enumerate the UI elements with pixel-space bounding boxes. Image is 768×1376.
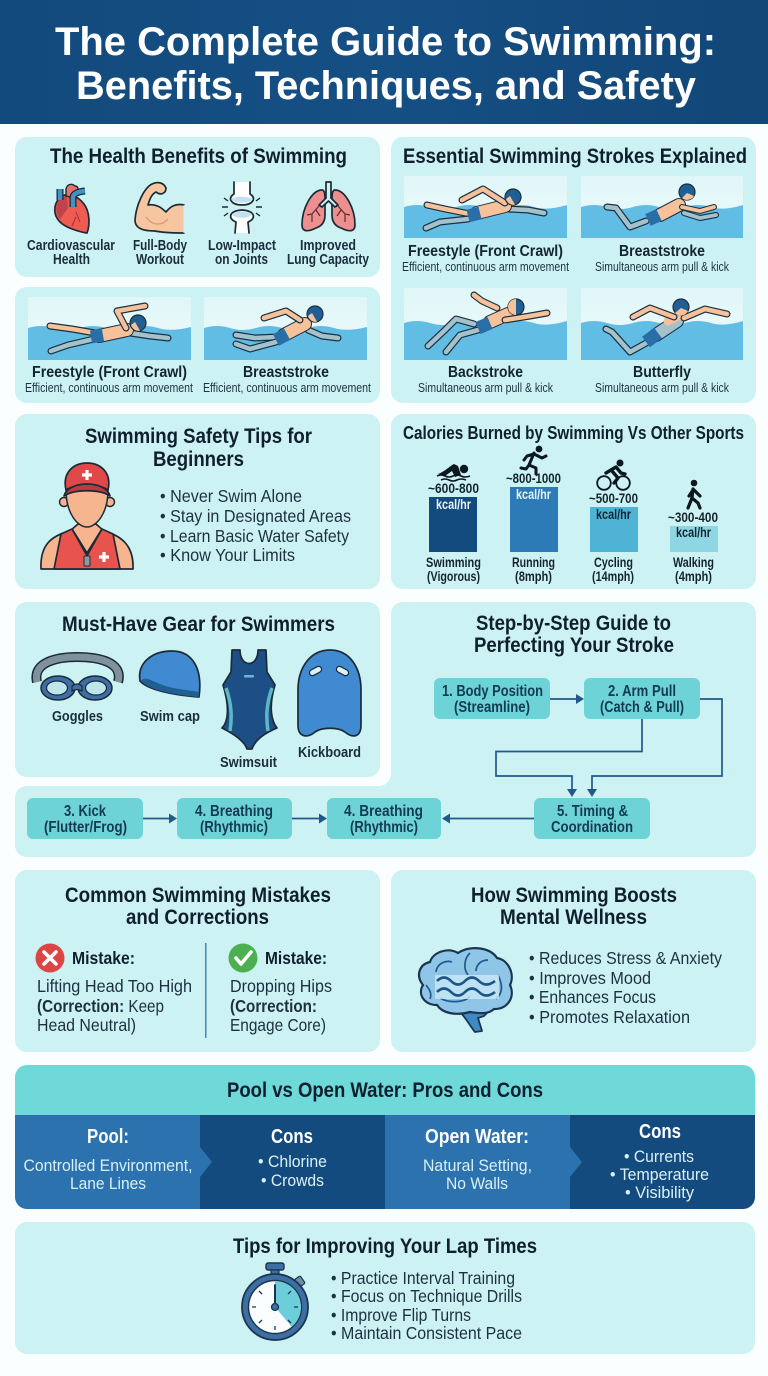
mistake text right: Mistake:	[265, 948, 327, 968]
step 4: 4. Breathing	[195, 803, 273, 820]
panel: common mistakes	[15, 870, 380, 1052]
column: pool cons: • Chlorine	[258, 1152, 327, 1171]
column: open water cons: Cons	[639, 1121, 681, 1143]
step 3: 3. Kick	[64, 803, 106, 820]
stroke captions left: Efficient, continuous arm movement	[25, 381, 193, 395]
mental wellness list	[529, 948, 722, 1027]
stroke captions top row	[402, 243, 730, 274]
icon: swim cap	[140, 651, 200, 697]
bar chart: kcal/hr	[596, 507, 632, 522]
icon: kickboard	[298, 650, 361, 736]
safety list: • Never Swim Alone	[160, 486, 302, 506]
stroke captions left	[25, 364, 371, 395]
stroke captions left: Efficient, continuous arm movement	[203, 381, 371, 395]
panel: gear: Must-Have Gear for Swimmers	[62, 613, 335, 636]
mental heading	[471, 884, 677, 929]
step 2: (Catch & Pull)	[600, 699, 684, 716]
gear labels: Swim cap	[140, 709, 200, 725]
column: open water pros: Open Water:	[425, 1126, 529, 1148]
backstroke illustration	[404, 288, 567, 360]
mistake text right	[230, 948, 332, 1035]
lap tips list: • Practice Interval Training	[331, 1268, 515, 1288]
panel: safety tips	[15, 414, 380, 589]
bar chart: (14mph)	[592, 569, 634, 584]
mistake text left: Lifting Head Too High	[37, 976, 192, 996]
column: pool pros: Controlled Environment,	[24, 1156, 192, 1175]
bar chart: kcal/hr	[676, 525, 712, 540]
stroke captions bottom row	[418, 364, 730, 395]
stroke captions top row: Breaststroke	[619, 243, 705, 260]
step 5: 5. Timing &	[557, 803, 628, 820]
icon: knee joint	[222, 182, 262, 233]
column: open water cons	[610, 1121, 709, 1202]
bar chart: Running	[512, 555, 555, 570]
divider	[205, 943, 206, 1038]
step 4 repeated: (Rhythmic)	[350, 819, 418, 836]
mental wellness list: • Enhances Focus	[529, 987, 656, 1007]
mental wellness list: • Reduces Stress & Anxiety	[529, 948, 722, 968]
butterfly illustration	[581, 288, 743, 360]
step 2: 2. Arm Pull	[608, 683, 676, 700]
panel: lap time tips: Tips for Improving Your Lap Times	[233, 1235, 537, 1258]
mental heading: How Swimming Boosts	[471, 884, 677, 907]
bar chart: (8mph)	[515, 569, 552, 584]
icon: swimsuit	[222, 650, 277, 749]
icon: brain with waves	[419, 948, 512, 1032]
column: open water pros: No Walls	[446, 1174, 508, 1193]
column: pool pros: Lane Lines	[70, 1174, 146, 1193]
benefit labels: Improved	[300, 238, 356, 254]
panel: step-by-step guide	[15, 602, 756, 857]
mistakes heading	[65, 884, 331, 929]
mistake text right: Engage Core)	[230, 1015, 326, 1035]
steps heading: Step-by-Step Guide to	[476, 612, 671, 635]
bar chart	[426, 471, 718, 584]
column: open water cons: • Visibility	[625, 1183, 694, 1202]
steps heading: Perfecting Your Stroke	[474, 634, 674, 657]
mistake text left: (Correction: Keep	[37, 996, 164, 1016]
freestyle illustration	[404, 176, 567, 238]
comparison heading: Pool vs Open Water: Pros and Cons	[227, 1079, 543, 1102]
column: open water pros	[423, 1126, 532, 1193]
icon: runner	[521, 446, 546, 474]
column: pool pros: Pool:	[87, 1126, 129, 1148]
icon: lifeguard	[41, 463, 133, 569]
header banner with title: Benefits, Techniques, and Safety	[76, 64, 697, 108]
panel: pool vs open water	[15, 1065, 755, 1209]
column: open water cons: • Temperature	[610, 1165, 709, 1184]
bar chart: kcal/hr	[516, 487, 552, 502]
stroke captions bottom row: Backstroke	[448, 364, 523, 381]
gear labels: Goggles	[52, 709, 103, 725]
benefit labels: on Joints	[215, 252, 268, 268]
icon: walker	[688, 480, 700, 508]
gear labels: Kickboard	[298, 745, 361, 761]
mistake text right: (Correction:	[230, 996, 317, 1016]
bar chart: Swimming	[426, 555, 481, 570]
mistakes heading: and Corrections	[126, 906, 269, 929]
mental wellness list: • Promotes Relaxation	[529, 1007, 690, 1027]
panel: health benefits	[15, 137, 380, 277]
header banner with title: The Complete Guide to Swimming:	[55, 20, 716, 64]
safety list: • Know Your Limits	[160, 545, 295, 565]
stroke captions left: Breaststroke	[243, 364, 329, 381]
bar chart: ~500-700	[589, 491, 638, 506]
column: pool cons: Cons	[271, 1126, 313, 1148]
panel: lap time tips	[15, 1222, 755, 1354]
icon: heart	[55, 184, 89, 233]
stroke captions bottom row: Simultaneous arm pull & kick	[595, 381, 730, 395]
icon: swimmer	[437, 464, 470, 481]
bar chart: ~800-1000	[506, 471, 561, 486]
freestyle illustration left	[28, 297, 191, 360]
step 1: 1. Body Position	[442, 683, 543, 700]
lap tips list	[331, 1268, 522, 1343]
stroke captions top row: Efficient, continuous arm movement	[402, 260, 569, 274]
column: open water pros: Natural Setting,	[423, 1156, 532, 1175]
icon: stopwatch	[242, 1263, 308, 1340]
icon: red cross	[36, 944, 64, 972]
stroke captions bottom row: Simultaneous arm pull & kick	[418, 381, 554, 395]
bar chart: (4mph)	[675, 569, 712, 584]
bar chart: kcal/hr	[436, 497, 472, 512]
mistake text left: Mistake:	[72, 948, 135, 968]
breaststroke illustration left	[204, 297, 367, 360]
step 4 repeated	[327, 798, 441, 839]
icon: green check	[228, 944, 258, 972]
step 3: (Flutter/Frog)	[44, 819, 127, 836]
benefit labels: Full-Body	[133, 238, 187, 254]
gear labels	[52, 709, 361, 771]
panel: mental wellness	[391, 870, 756, 1052]
benefit labels: Cardiovascular	[27, 238, 115, 254]
step 4 repeated: 4. Breathing	[344, 803, 423, 820]
mistake text left	[37, 948, 192, 1035]
stroke captions bottom row: Butterfly	[633, 364, 691, 381]
step 4: (Rhythmic)	[200, 819, 268, 836]
safety list	[160, 486, 351, 565]
icon: cyclist	[597, 460, 630, 490]
mental heading: Mental Wellness	[500, 906, 647, 929]
icon: goggles	[36, 657, 119, 700]
step 5	[534, 798, 650, 839]
benefit labels: Health	[53, 252, 90, 268]
panel: two strokes (left)	[15, 287, 380, 403]
bar chart: ~600-800	[428, 481, 479, 496]
safety heading	[85, 425, 312, 471]
flow arrows	[143, 694, 722, 824]
benefit labels: Lung Capacity	[287, 252, 369, 268]
panel: health benefits: The Health Benefits of Swimming	[50, 145, 347, 168]
header banner with title	[0, 0, 768, 124]
lap tips list: • Focus on Technique Drills	[331, 1286, 522, 1306]
breaststroke illustration	[581, 176, 743, 238]
gear labels: Swimsuit	[220, 755, 277, 771]
safety heading: Swimming Safety Tips for	[85, 425, 312, 448]
stroke captions top row: Freestyle (Front Crawl)	[408, 243, 563, 260]
panel: calories chart	[391, 414, 756, 589]
panel: essential strokes	[391, 137, 756, 403]
steps heading	[474, 612, 674, 657]
safety list: • Stay in Designated Areas	[160, 506, 351, 526]
icon: lungs	[302, 182, 355, 231]
bar chart: Cycling	[594, 555, 633, 570]
column: pool cons	[258, 1126, 327, 1190]
column: pool cons: • Crowds	[261, 1171, 324, 1190]
column: pool pros	[24, 1126, 192, 1193]
safety list: • Learn Basic Water Safety	[160, 526, 349, 546]
mistake text left: Head Neutral)	[37, 1015, 136, 1035]
column: open water cons: • Currents	[624, 1147, 694, 1166]
benefit labels: Low-Impact	[208, 238, 276, 254]
stroke captions top row: Simultaneous arm pull & kick	[595, 260, 730, 274]
stroke captions left: Freestyle (Front Crawl)	[32, 364, 187, 381]
step 4	[177, 798, 292, 839]
benefit labels	[27, 238, 369, 268]
icon: flexed arm	[135, 183, 184, 233]
mistake text right: Dropping Hips	[230, 976, 332, 996]
safety heading: Beginners	[153, 448, 244, 471]
step 1	[434, 678, 550, 719]
bar chart: (Vigorous)	[427, 569, 480, 584]
mistakes heading: Common Swimming Mistakes	[65, 884, 331, 907]
bar chart: Walking	[673, 555, 714, 570]
panel: gear	[15, 602, 380, 777]
step 2	[584, 678, 700, 719]
step 3	[27, 798, 143, 839]
bar chart: ~300-400	[668, 510, 718, 525]
step 1: (Streamline)	[454, 699, 530, 716]
step 5: Coordination	[551, 819, 633, 836]
lap tips list: • Maintain Consistent Pace	[331, 1323, 522, 1343]
mental wellness list: • Improves Mood	[529, 968, 651, 988]
benefit labels: Workout	[136, 252, 184, 268]
lap tips list: • Improve Flip Turns	[331, 1305, 471, 1325]
